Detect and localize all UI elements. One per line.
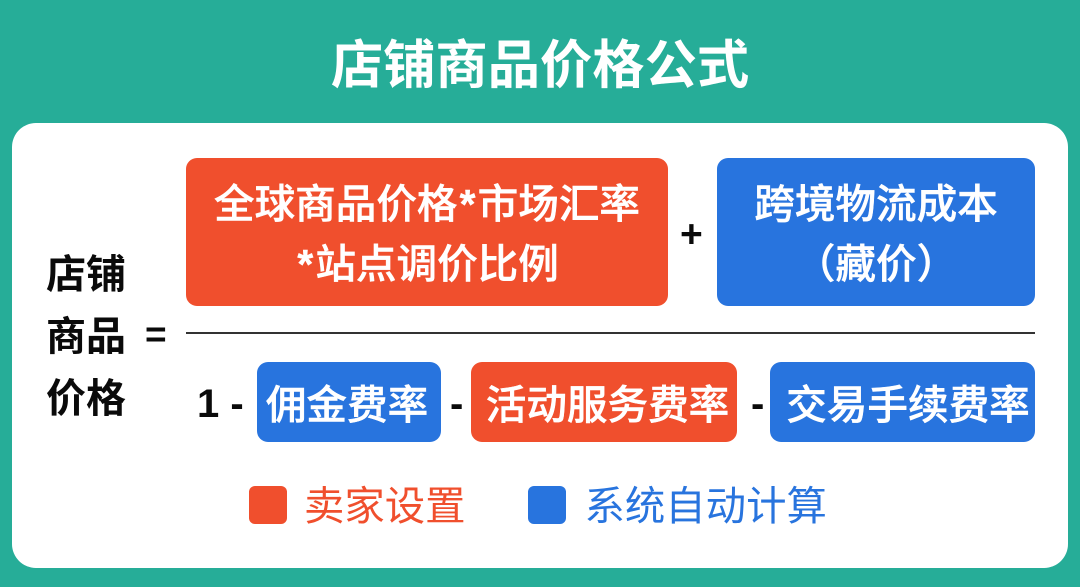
legend: system calculated [528,483,827,529]
label: store product price: 商品 [46,315,126,359]
box: transaction fee rate [770,362,1035,442]
legend swatch: blue [528,486,566,524]
label: store product price: 价格 [46,377,126,421]
legend text: seller set: 卖家设置 [304,483,466,529]
box: cross-border logistics cost: 跨境物流成本 [754,181,998,227]
label: store product price: 店铺 [46,253,126,297]
box: commission rate [257,362,441,442]
box: transaction fee rate: 交易手续费率 [786,382,1030,428]
title: 店铺商品价格公式 [331,37,749,95]
box: cross-border logistics cost [717,158,1035,306]
box: global product price: 全球商品价格*市场汇率 [214,181,640,227]
box: global product price: *站点调价比例 [297,241,559,287]
box: campaign service fee rate: 活动服务费率 [486,382,729,428]
fraction line [186,332,1035,334]
plus sign: + [680,213,703,256]
legend swatch: red [249,486,287,524]
box: cross-border logistics cost: （藏价） [795,241,957,287]
box: campaign service fee rate [471,362,737,442]
legend: seller set [249,483,466,529]
box: global product price [186,158,668,306]
equals sign: = [145,314,167,355]
minus sign: - [751,382,764,426]
box: commission rate: 佣金费率 [266,382,428,428]
label: store product price [46,253,126,421]
panel: formula [12,123,1068,568]
minus sign: - [450,382,463,426]
legend text: system calculated: 系统自动计算 [584,483,827,529]
text: one minus: 1 - [197,382,244,426]
